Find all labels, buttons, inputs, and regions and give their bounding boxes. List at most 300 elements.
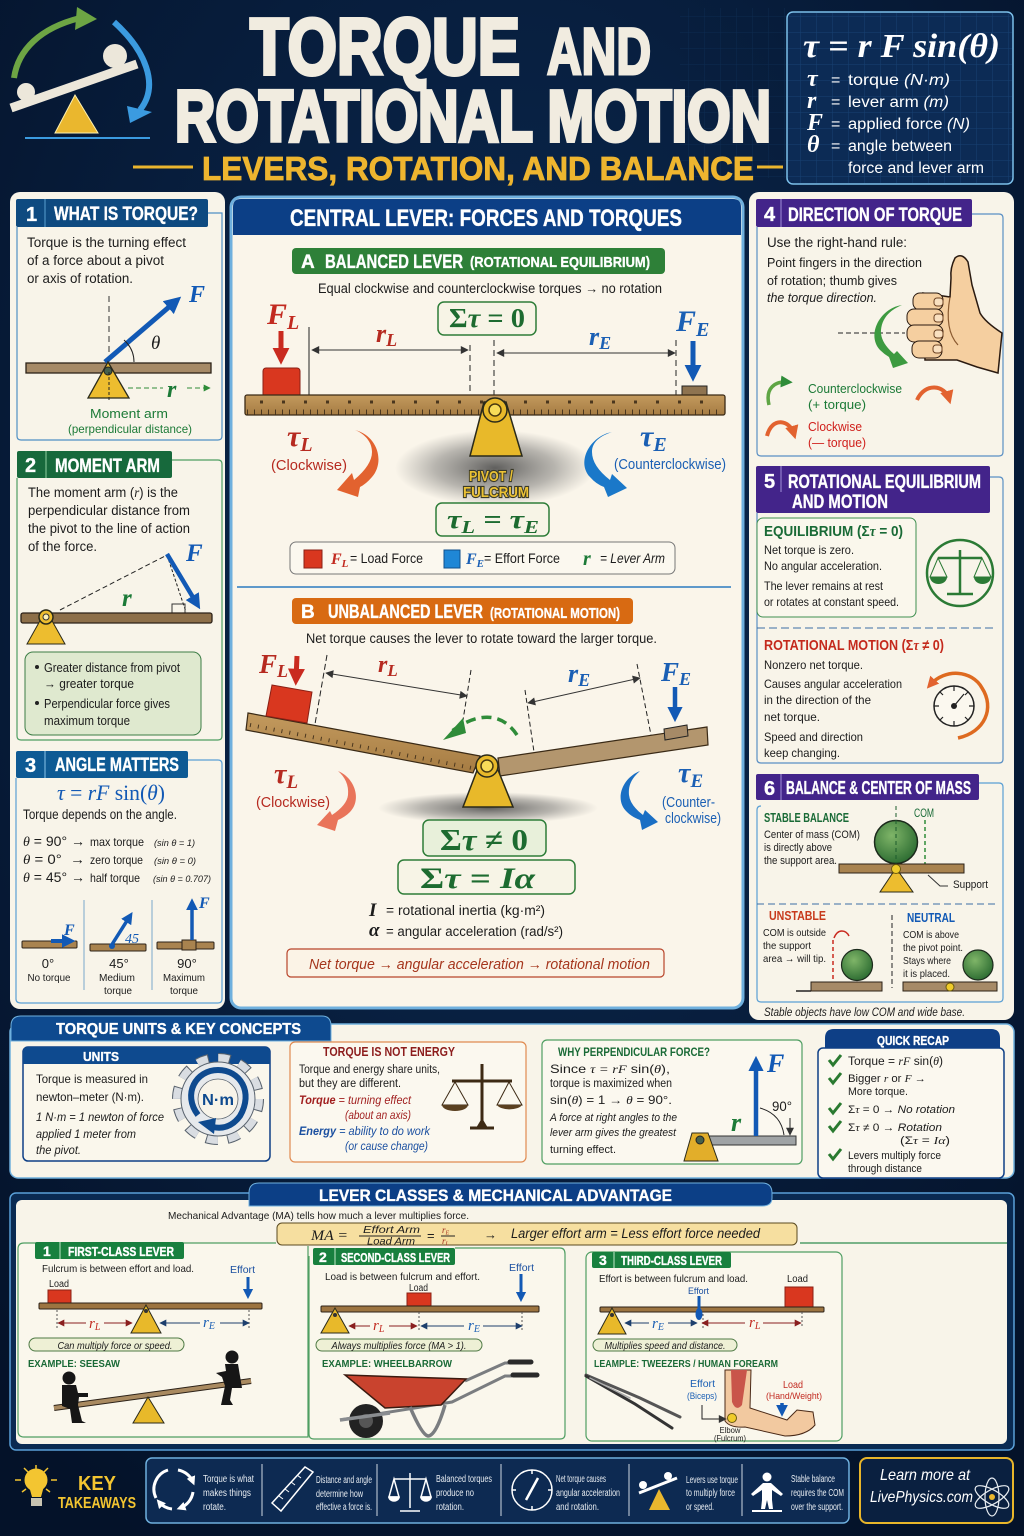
card: why perpendicular force: sin(θ) = 1 → θ = 90°. xyxy=(550,1093,672,1107)
section 5: rotational equilibrium and motion: No angular acceleration. xyxy=(764,559,882,573)
icon: compass dial xyxy=(512,1470,552,1510)
card: torque is not energy: Torque = turning effect xyxy=(299,1095,412,1107)
card: torque is not energy: but they are different. xyxy=(299,1078,401,1090)
section 3: angle matters: (sin θ = 0) xyxy=(154,856,196,867)
key takeaways strip: effective a force is. xyxy=(316,1502,372,1513)
card: second-class lever: r xyxy=(373,1318,379,1334)
panel: torque formula xyxy=(787,12,1013,184)
illustration: tweezers xyxy=(586,1375,680,1428)
section 6: balance and center of mass: the support xyxy=(763,940,811,952)
section 5: rotational equilibrium and motion: Net torque is zero. xyxy=(764,543,854,557)
section A: balanced lever: (ROTATIONAL EQUILIBRIUM) xyxy=(470,254,650,271)
learn more box: LivePhysics.com xyxy=(870,1489,973,1506)
card: first-class lever: L xyxy=(94,1322,101,1333)
section 4: direction of torque: (— torque) xyxy=(808,436,866,450)
section 3: angle matters: Torque depends on the angle. xyxy=(23,807,177,822)
card: quick recap: (Στ = Iα) xyxy=(900,1135,950,1147)
section B: unbalanced lever: = angular acceleration (rad/s²) xyxy=(386,924,563,939)
icon: gear with N·m xyxy=(177,1058,259,1140)
section B: unbalanced lever: UNBALANCED LEVER xyxy=(328,602,483,623)
card: third-class lever: r xyxy=(749,1315,755,1331)
icon: right hand thumbs up xyxy=(907,256,1002,373)
card: units: UNITS xyxy=(83,1049,119,1064)
icon: gauge with orange rotation arrow xyxy=(930,673,988,738)
key takeaways strip: over the support. xyxy=(791,1502,843,1513)
section A: balanced lever: E xyxy=(598,333,611,353)
section B: unbalanced lever: B xyxy=(301,602,315,623)
section B: unbalanced lever: = rotational inertia (kg·m²) xyxy=(386,903,545,918)
section A: balanced lever: PIVOT / xyxy=(469,468,514,485)
icon: ruler xyxy=(272,1467,313,1511)
section 5: rotational equilibrium and motion: net torque. xyxy=(764,710,820,724)
card: third-class lever: LEAMPLE: TWEEZERS / HUMAN FOREARM xyxy=(594,1358,778,1370)
section A: balanced lever: Equal clockwise and counterclockwise torques → no rotation xyxy=(318,281,662,296)
panel: torque formula: angle between xyxy=(848,138,952,155)
MA formula bar xyxy=(277,1223,797,1248)
MA formula bar: r xyxy=(442,1236,446,1246)
illustration: human forearm xyxy=(687,1370,822,1443)
section A: balanced lever: τ xyxy=(287,420,300,453)
card: quick recap: QUICK RECAP xyxy=(877,1033,949,1048)
section 5: rotational equilibrium and motion: EQUILIBRIUM (Στ = 0) xyxy=(764,523,903,540)
panel: torque formula: τ = r F sin(θ) xyxy=(803,28,1000,65)
icon: atom xyxy=(972,1478,1012,1516)
section B: unbalanced lever: clockwise) xyxy=(665,810,721,827)
card: third-class lever: r xyxy=(652,1316,658,1332)
card: third-class lever: Load xyxy=(787,1274,808,1285)
card: second-class lever: SECOND-CLASS LEVER xyxy=(341,1251,450,1265)
section 6: balance and center of mass: is directly above xyxy=(764,842,832,854)
section B: unbalanced lever: (ROTATIONAL MOTION) xyxy=(490,605,620,622)
section A: balanced lever: Στ = 0 xyxy=(449,303,525,333)
section 3: angle matters: F xyxy=(63,922,75,939)
card: third-class lever: Effort xyxy=(688,1286,709,1297)
MA formula bar: E xyxy=(445,1230,450,1236)
section 5: rotational equilibrium and motion: ROTATIONAL MOTION (Στ ≠ 0) xyxy=(764,637,944,654)
section B: unbalanced lever: F xyxy=(259,649,277,679)
key takeaways strip: requires the COM xyxy=(791,1488,844,1499)
card: second-class lever: 2 xyxy=(319,1249,327,1265)
section 3: angle matters: θ = 90° → xyxy=(23,833,85,850)
panel: torque formula: applied force (N) xyxy=(848,116,970,133)
card: quick recap: through distance xyxy=(848,1163,922,1175)
card: first-class lever: Fulcrum is between effort and load. xyxy=(42,1263,194,1275)
section B: unbalanced lever: E xyxy=(689,771,703,792)
section 5: rotational equilibrium and motion: Causes angular acceleration xyxy=(764,677,902,691)
card: why perpendicular force xyxy=(542,1040,802,1164)
section 1: what is torque: 1 xyxy=(26,204,37,226)
section A: balanced lever: (Counterclockwise) xyxy=(614,456,726,473)
card: quick recap: Στ ≠ 0 → Rotation xyxy=(848,1122,942,1134)
legend xyxy=(290,542,675,574)
panel: central lever xyxy=(231,197,743,1008)
header icon: seesaw with rotation arrows xyxy=(11,7,152,138)
section 5: rotational equilibrium and motion: 5 xyxy=(764,471,775,493)
section B: unbalanced lever: E xyxy=(577,670,590,690)
key takeaways strip: to multiply force xyxy=(686,1488,735,1499)
section 5: rotational equilibrium and motion: keep changing. xyxy=(764,746,840,760)
card: third-class lever: L xyxy=(754,1321,761,1332)
section B: unbalanced lever: r xyxy=(378,652,387,678)
section 4: direction of torque: DIRECTION OF TORQUE xyxy=(788,205,962,226)
section 1: what is torque: r xyxy=(167,377,177,403)
card: torque is not energy: Energy = ability to do work xyxy=(299,1126,431,1138)
section 3: angle matters: (sin θ = 1) xyxy=(154,838,195,849)
section A: balanced lever: r xyxy=(589,322,599,351)
card: torque is not energy xyxy=(290,1042,526,1162)
section 6: balance and center of mass xyxy=(756,774,1003,1019)
panel: central lever: CENTRAL LEVER: FORCES AND TORQUES xyxy=(290,205,682,232)
card: first-class lever: Load xyxy=(49,1279,69,1290)
section 2: moment arm: of the force. xyxy=(28,539,97,554)
section 6: balance and center of mass: Center of mass (COM) xyxy=(764,829,860,841)
section 5: rotational equilibrium and motion xyxy=(756,466,1003,763)
section 2: moment arm: r xyxy=(122,585,132,612)
card: quick recap xyxy=(818,1029,1004,1178)
section 1: what is torque: WHAT IS TORQUE? xyxy=(54,204,198,225)
card: second-class lever: Load is between fulcrum and effort. xyxy=(325,1271,480,1283)
section 4: direction of torque: of rotation; thumb gives xyxy=(767,273,897,288)
panel: left column xyxy=(10,192,225,1009)
card: second-class lever xyxy=(309,1248,565,1439)
section 6: balance and center of mass: 6 xyxy=(764,778,775,800)
card: third-class lever: 3 xyxy=(599,1252,607,1268)
key takeaways strip: rotate. xyxy=(203,1502,226,1513)
MA formula bar: L xyxy=(445,1242,450,1248)
illustration: human forearm: (Hand/Weight) xyxy=(766,1391,822,1402)
section 3: angle matters: θ = 0° → xyxy=(23,851,85,868)
illustration: wheelbarrow xyxy=(340,1362,537,1438)
legend: E xyxy=(476,558,484,570)
section A: balanced lever: L xyxy=(286,312,299,334)
MA formula bar: Larger effort arm = Less effort force needed xyxy=(511,1226,760,1241)
card: units: applied 1 meter from xyxy=(36,1129,136,1141)
legend: F xyxy=(466,551,477,568)
section 1: what is torque: Torque is the turning effect xyxy=(27,235,186,250)
tip box: → greater torque xyxy=(44,677,134,691)
section 2: moment arm xyxy=(17,451,222,740)
illustration: human forearm: (Fulcrum) xyxy=(714,1434,746,1443)
section 3: angle matters: 3 xyxy=(25,755,36,777)
card: second-class lever: EXAMPLE: WHEELBARROW xyxy=(322,1358,452,1370)
learn more box xyxy=(860,1458,1013,1523)
section A: balanced lever: (Clockwise) xyxy=(271,457,347,474)
section 5: rotational equilibrium and motion: Nonzero net torque. xyxy=(764,658,863,672)
MA formula bar: = xyxy=(427,1228,435,1243)
card: second-class lever: Always multiplies force (MA > 1). xyxy=(331,1340,466,1352)
section 4: direction of torque xyxy=(756,199,1003,456)
key takeaways strip: and rotation. xyxy=(556,1502,599,1513)
panel: torque formula: = xyxy=(831,94,840,111)
section A: balanced lever: BALANCED LEVER xyxy=(325,252,463,273)
MA formula bar: Load Arm xyxy=(367,1236,415,1248)
card: why perpendicular force: WHY PERPENDICULAR FORCE? xyxy=(558,1045,710,1059)
section 6: balance and center of mass: COM is outside xyxy=(763,927,826,939)
section 6: balance and center of mass: the pivot point. xyxy=(903,942,963,954)
card: torque is not energy: Torque and energy share units, xyxy=(299,1064,440,1076)
section 3: angle matters: ANGLE MATTERS xyxy=(55,755,179,776)
section B: unbalanced lever: F xyxy=(661,657,679,687)
card: torque is not energy: (or cause change) xyxy=(345,1141,428,1153)
card: torque is not energy: TORQUE IS NOT ENERGY xyxy=(323,1045,456,1059)
section 3: angle matters: No torque xyxy=(28,972,71,984)
section B: unbalanced lever: r xyxy=(568,659,578,688)
card: second-class lever: r xyxy=(468,1318,474,1334)
title xyxy=(175,2,771,157)
card: third-class lever: Effort is between fulcrum and load. xyxy=(599,1273,748,1285)
key takeaways strip: Distance and angle xyxy=(316,1475,372,1486)
MA formula bar: → xyxy=(484,1227,497,1242)
panel: torque formula: τ xyxy=(807,66,819,92)
section 6: balance and center of mass: STABLE BALANCE xyxy=(764,810,849,825)
panel: torque formula: force and lever arm xyxy=(848,160,984,177)
section 1: what is torque: (perpendicular distance) xyxy=(68,422,192,436)
card: first-class lever: r xyxy=(89,1316,95,1332)
section 5: rotational equilibrium and motion: AND MOTION xyxy=(792,492,888,513)
MA formula bar: Effort Arm xyxy=(363,1224,420,1236)
section 3: angle matters: torque xyxy=(104,985,132,997)
card: units: Torque is measured in xyxy=(36,1072,148,1086)
key takeaways strip: makes things xyxy=(203,1488,251,1499)
card: why perpendicular force: torque is maximized when xyxy=(550,1078,672,1090)
panel: torque formula: = xyxy=(831,116,840,133)
section B: unbalanced lever: τ xyxy=(274,759,286,790)
section 3: angle matters: zero torque xyxy=(90,853,143,867)
section 6: balance and center of mass: the support area. xyxy=(764,855,837,867)
panel: torque units and key concepts xyxy=(10,1016,1014,1178)
icon: balance scale in circle xyxy=(927,540,993,606)
section 3: angle matters xyxy=(16,751,222,1003)
section 5: rotational equilibrium and motion: or rotates at constant speed. xyxy=(764,595,899,609)
section 5: rotational equilibrium and motion: Speed and direction xyxy=(764,730,863,744)
card: quick recap: Bigger r or F → xyxy=(848,1073,926,1085)
tip box: Perpendicular force gives xyxy=(44,697,170,711)
section 3: angle matters: F xyxy=(198,895,210,912)
card: first-class lever xyxy=(18,1242,308,1437)
section 3: angle matters: 45° xyxy=(109,956,129,971)
section 6: balance and center of mass: Stable objects have low COM and wide base. xyxy=(764,1007,965,1019)
legend: = Load Force xyxy=(350,551,423,566)
section 3: angle matters: Medium xyxy=(99,972,135,984)
section B: unbalanced lever: L xyxy=(386,661,398,680)
section 5: rotational equilibrium and motion: The lever remains at rest xyxy=(764,579,884,593)
card: quick recap: Levers multiply force xyxy=(848,1150,941,1162)
legend: = Lever Arm xyxy=(600,551,665,566)
section 4: direction of torque: Use the right-hand rule: xyxy=(767,235,907,250)
icon: brass scale xyxy=(442,1064,522,1128)
card: second-class lever: Effort xyxy=(509,1262,534,1274)
key takeaways strip: Levers use torque xyxy=(686,1475,738,1486)
card: second-class lever: L xyxy=(378,1324,385,1335)
section B: unbalanced lever: L xyxy=(285,772,298,793)
section 4: direction of torque: Clockwise xyxy=(808,420,862,434)
section 6: balance and center of mass: Stays where xyxy=(903,955,951,967)
section A: balanced lever: E xyxy=(652,434,667,456)
key takeaways strip xyxy=(146,1458,849,1523)
section B: unbalanced lever: Net torque causes the lever to rotate toward the larger torque. xyxy=(306,631,657,646)
section A: balanced lever: L xyxy=(299,434,313,456)
key takeaways strip: or speed. xyxy=(686,1502,714,1513)
section 6: balance and center of mass: Support xyxy=(953,879,988,891)
card: third-class lever: E xyxy=(657,1322,664,1333)
section 4: direction of torque: Point fingers in the direction xyxy=(767,255,922,270)
legend: L xyxy=(341,558,349,570)
section B: unbalanced lever: L xyxy=(276,661,288,681)
card: quick recap: Στ = 0 → No rotation xyxy=(848,1104,955,1116)
card: first-class lever: E xyxy=(208,1321,215,1332)
illustration: seesaw with two children xyxy=(54,1350,251,1423)
legend: F xyxy=(331,551,342,568)
section A: balanced lever: F xyxy=(676,305,696,338)
key takeaways strip: determine how xyxy=(316,1489,364,1500)
section A: balanced lever: FULCRUM xyxy=(463,484,529,501)
panel: torque formula: r xyxy=(807,88,817,114)
illustration: human forearm: Elbow xyxy=(720,1426,741,1435)
section 2: moment arm: F xyxy=(185,540,203,567)
section A: balanced lever: E xyxy=(695,319,709,341)
illustration: human forearm: (Biceps) xyxy=(687,1391,717,1402)
section 6: balance and center of mass: COM is above xyxy=(903,929,959,941)
illustration: human forearm: Load xyxy=(783,1379,803,1391)
section A: balanced lever: F xyxy=(267,298,287,331)
section 3: angle matters: half torque xyxy=(90,871,140,885)
card: torque is not energy: (about an axis) xyxy=(345,1110,411,1122)
learn more box: Learn more at xyxy=(880,1467,971,1484)
key takeaways label with light bulb: KEY xyxy=(78,1473,117,1495)
card: first-class lever: EXAMPLE: SEESAW xyxy=(28,1358,120,1370)
panel: torque formula: = xyxy=(831,138,840,155)
section A: balanced lever: L xyxy=(385,330,397,350)
card: first-class lever: r xyxy=(203,1315,209,1331)
panel: lever classes and mechanical advantage: LEVER CLASSES & MECHANICAL ADVANTAGE xyxy=(319,1187,672,1205)
section 3: angle matters: θ = 45° → xyxy=(23,869,85,886)
section B: unbalanced lever xyxy=(246,598,721,977)
panel: torque formula: = xyxy=(831,72,840,89)
card: units: 1 N·m = 1 newton of force xyxy=(36,1112,164,1124)
card: second-class lever: E xyxy=(473,1324,480,1335)
section 1: what is torque: or axis of rotation. xyxy=(27,271,133,286)
section 3: angle matters: 0° xyxy=(42,956,54,971)
tip box xyxy=(25,652,201,735)
panel: lever classes and mechanical advantage: Mechanical Advantage (MA) tells how much a lever multiplies force. xyxy=(168,1210,469,1222)
section B: unbalanced lever: (Counter- xyxy=(662,794,715,811)
section 3: angle matters: torque xyxy=(170,985,198,997)
section 1: what is torque: of a force about a pivot xyxy=(27,253,164,268)
card: why perpendicular force: 90° xyxy=(772,1098,792,1114)
legend: r xyxy=(583,548,591,570)
title: AND xyxy=(547,14,651,88)
section 1: what is torque: θ xyxy=(151,333,160,354)
section B: unbalanced lever: I xyxy=(368,900,377,921)
section 3: angle matters: Maximum xyxy=(163,972,205,984)
section 6: balance and center of mass: UNSTABLE xyxy=(769,909,826,923)
tip box: Greater distance from pivot xyxy=(44,661,180,675)
section 2: moment arm: MOMENT ARM xyxy=(55,456,160,477)
section 6: balance and center of mass: COM xyxy=(914,806,934,820)
section 3: angle matters: τ = rF sin(θ) xyxy=(57,780,165,805)
subtitle: LEVERS, ROTATION, AND BALANCE xyxy=(202,150,754,187)
card: quick recap: Torque = rF sin(θ) xyxy=(848,1056,943,1068)
card: units xyxy=(23,1047,270,1161)
panel: right column xyxy=(749,192,1014,1020)
card: quick recap: More torque. xyxy=(848,1086,908,1098)
section B: unbalanced lever: α xyxy=(369,920,380,941)
section 6: balance and center of mass: area → will tip. xyxy=(763,953,826,965)
section 2: moment arm: 2 xyxy=(25,455,36,477)
key takeaways label with light bulb: TAKEAWAYS xyxy=(58,1495,136,1512)
section A: balanced lever: A xyxy=(301,252,315,273)
section B: unbalanced lever: Net torque → angular acceleration → rotational motion xyxy=(309,957,650,973)
section 1: what is torque xyxy=(16,199,222,440)
card: why perpendicular force: turning effect. xyxy=(550,1144,616,1156)
key takeaways strip: produce no xyxy=(436,1488,474,1499)
card: units: the pivot. xyxy=(36,1145,81,1157)
section A: balanced lever: L xyxy=(460,517,475,537)
card: first-class lever: 1 xyxy=(43,1243,51,1259)
panel: torque units and key concepts: TORQUE UNITS & KEY CONCEPTS xyxy=(56,1021,301,1038)
section 2: moment arm: The moment arm (r) is the xyxy=(28,485,178,500)
section 3: angle matters: 90° xyxy=(177,956,197,971)
section A: balanced lever: = τ xyxy=(475,505,526,534)
section 2: moment arm: perpendicular distance from xyxy=(28,503,190,518)
legend: = Effort Force xyxy=(484,551,560,566)
card: why perpendicular force: F xyxy=(766,1049,784,1078)
title: TORQUE xyxy=(250,2,520,91)
section 6: balance and center of mass: NEUTRAL xyxy=(907,911,955,925)
icon: lever with load xyxy=(639,1472,677,1510)
section A: balanced lever: E xyxy=(523,517,539,537)
key takeaways strip: Net torque causes xyxy=(556,1474,606,1485)
key takeaways label with light bulb xyxy=(15,1465,136,1512)
section B: unbalanced lever: E xyxy=(678,669,691,689)
section 3: angle matters: 45 xyxy=(125,932,139,947)
icon: gear with N·m: N·m xyxy=(202,1092,234,1109)
panel: torque formula: lever arm (m) xyxy=(848,94,949,111)
card: why perpendicular force: r xyxy=(731,1108,742,1137)
card: why perpendicular force: lever arm gives the greatest xyxy=(550,1127,677,1139)
card: why perpendicular force: A force at right angles to the xyxy=(549,1112,677,1124)
section B: unbalanced lever: (Clockwise) xyxy=(256,794,330,811)
key takeaways strip: angular acceleration xyxy=(556,1488,620,1499)
section B: unbalanced lever: Στ ≠ 0 xyxy=(440,822,528,857)
section 4: direction of torque: 4 xyxy=(764,204,776,226)
card: third-class lever: THIRD-CLASS LEVER xyxy=(621,1254,722,1268)
title: ROTATIONAL MOTION xyxy=(175,77,771,157)
section 3: angle matters: (sin θ = 0.707) xyxy=(153,874,211,885)
tip box: maximum torque xyxy=(44,714,130,728)
key takeaways strip: Torque is what xyxy=(203,1474,254,1485)
section 1: what is torque: F xyxy=(188,282,205,308)
card: first-class lever: Can multiply force or speed. xyxy=(58,1340,172,1352)
key takeaways strip: Stable balance xyxy=(791,1474,835,1485)
section 4: direction of torque: (+ torque) xyxy=(808,398,866,412)
key takeaways strip: Balanced torques xyxy=(436,1474,492,1485)
section 4: direction of torque: Counterclockwise xyxy=(808,382,902,396)
card: first-class lever: FIRST-CLASS LEVER xyxy=(68,1245,174,1259)
panel: lever classes and mechanical advantage xyxy=(10,1183,1014,1450)
panel: torque formula: F xyxy=(806,110,823,136)
section B: unbalanced lever: Στ = Iα xyxy=(420,862,535,895)
icon: rotating arrows xyxy=(154,1470,193,1509)
section A: balanced lever: τ xyxy=(640,420,653,453)
card: why perpendicular force: Since τ = rF sin( θ), xyxy=(550,1062,670,1076)
panel: torque formula: θ xyxy=(807,132,820,158)
section 6: balance and center of mass: it is placed. xyxy=(903,968,950,980)
section 3: angle matters: max torque xyxy=(90,835,144,849)
section 4: direction of torque: the torque direction. xyxy=(767,290,877,305)
icon: balanced person xyxy=(751,1472,783,1512)
key takeaways strip: rotation. xyxy=(436,1502,464,1513)
